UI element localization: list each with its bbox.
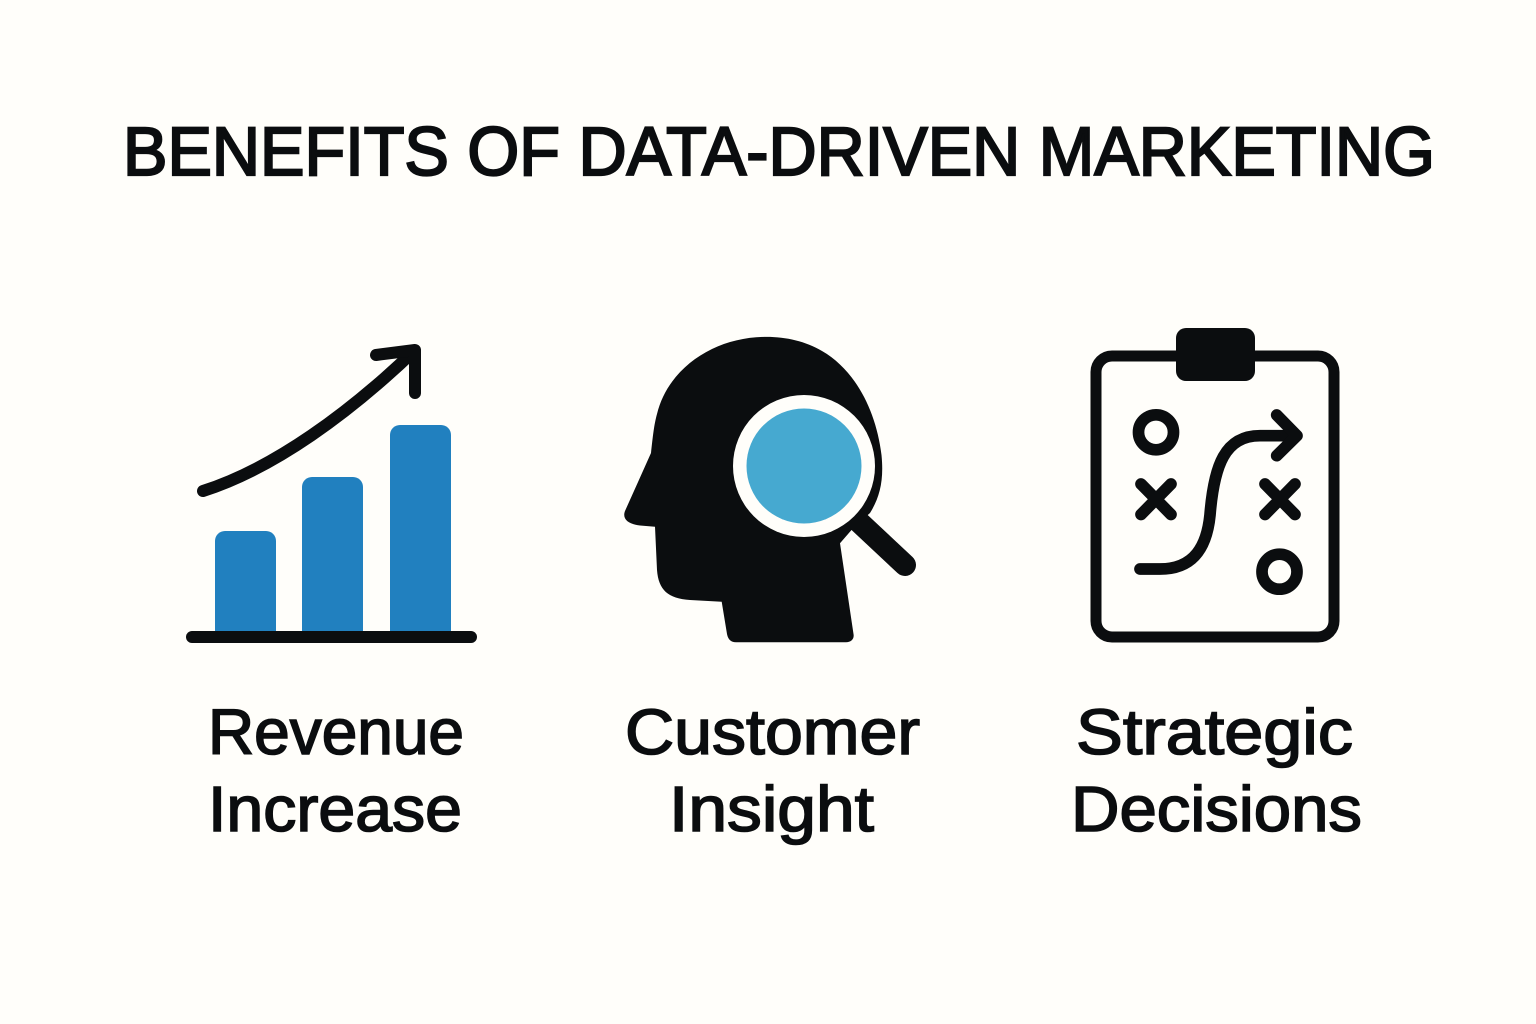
play symbols — [1138, 415, 1297, 589]
label: Increase — [208, 773, 462, 845]
label: Customer — [625, 696, 920, 768]
panel: customer insight — [624, 337, 920, 845]
magnifying glass — [733, 395, 905, 565]
label: Insight — [669, 773, 874, 845]
arrow — [203, 350, 415, 491]
label: Revenue — [208, 696, 464, 768]
head silhouette — [624, 337, 882, 642]
icon: head with magnifying glass — [624, 337, 905, 642]
icon: clipboard with play diagram — [1096, 328, 1334, 637]
panel: strategic decisions — [1071, 328, 1362, 845]
label — [625, 696, 920, 845]
bar chart — [186, 425, 477, 643]
panel: revenue increase — [186, 350, 477, 845]
label — [1071, 696, 1362, 845]
label — [208, 696, 464, 845]
label: Strategic — [1076, 696, 1353, 768]
label: Decisions — [1071, 773, 1362, 845]
clip — [1176, 328, 1255, 381]
clipboard — [1096, 356, 1334, 637]
icon: bar chart with rising arrow — [186, 350, 477, 643]
title: BENEFITS OF DATA-DRIVEN MARKETING — [123, 113, 1435, 190]
